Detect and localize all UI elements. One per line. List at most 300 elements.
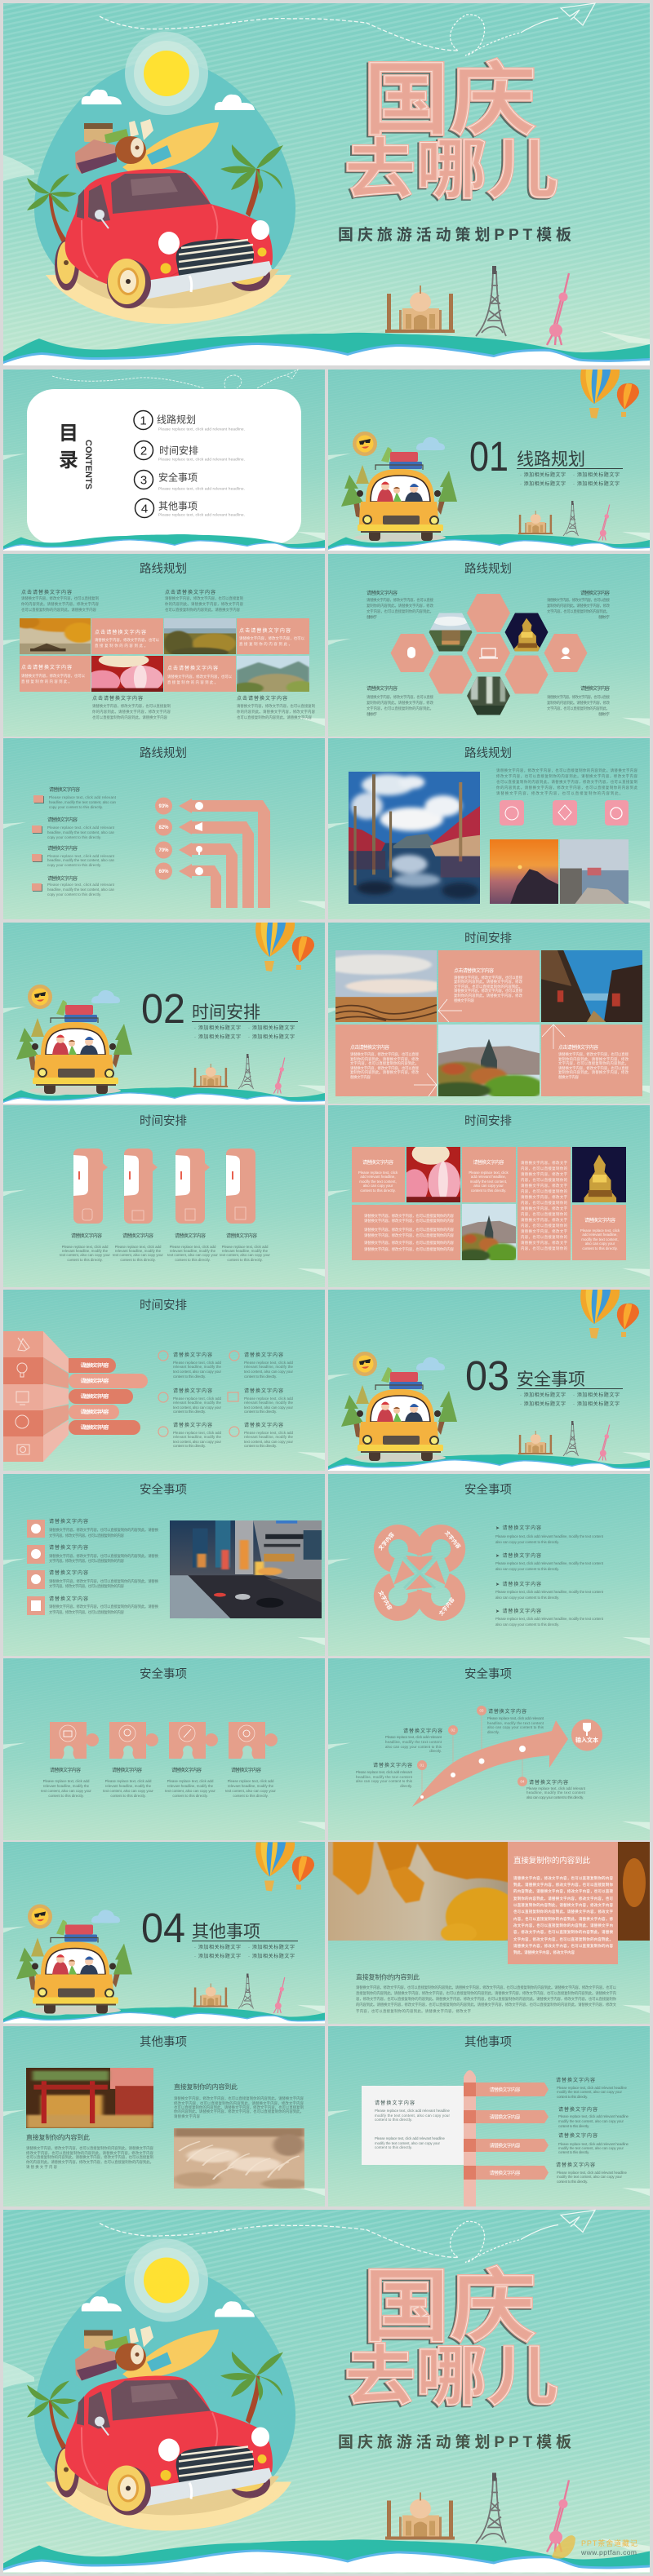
photo grid: 请替换文字内容，修改文字内容，也可以 xyxy=(21,673,86,679)
markers: 01 xyxy=(420,1764,424,1767)
pink text panel: 容，修改文字内容，也可以直接复制你的内容到此。请替换 xyxy=(513,1929,614,1935)
caption 2 xyxy=(113,1233,163,1262)
white card: content to this directly. xyxy=(375,2145,412,2149)
text block top right: 请替换文字内容，修改文字内容，也可以直接复制 xyxy=(165,595,244,601)
pink cell C: modify the text content, xyxy=(470,1180,507,1184)
section heading: 线路规划 xyxy=(517,450,585,469)
bullets: · 添加相关标题文字 xyxy=(573,480,620,487)
callout 03: also can copy your content to this xyxy=(487,1725,544,1729)
text block top left: 你的内容到此。请替换文字内容，修改文字内容 xyxy=(21,601,100,607)
title: 路线规划 xyxy=(464,746,512,760)
item grid: content to this directly. xyxy=(173,1374,206,1379)
left list: 请替换文字内容 xyxy=(47,875,78,882)
caption 2: content to this directly. xyxy=(120,1258,156,1262)
list text: Please replace text, click add relevant headline, modify the text content xyxy=(495,1590,604,1594)
title: 安全事项 xyxy=(140,1666,187,1681)
sign captions: Please replace text, click add relevant headline xyxy=(558,2114,629,2118)
funnel bars: 请替换文字内容 xyxy=(80,1378,109,1384)
bullets: · 添加相关标题文字 xyxy=(194,1944,241,1950)
caption 1 xyxy=(60,1233,110,1262)
photo grid: 请替换文字内容，修改文字内容，也可以 xyxy=(239,635,305,641)
pink text cell: 请替换文字内容，修改文字内容，也可以直接 xyxy=(350,1065,420,1071)
callout 03: Please replace text, click add relevant xyxy=(487,1716,544,1720)
caption 1: text content, also can copy your xyxy=(60,1253,110,1257)
text bottom right: 复制你的内容到此。请替换文字内容，修改 xyxy=(547,700,611,706)
callout 02: Please replace text, click add relevant xyxy=(385,1735,442,1739)
panel: route grid slide xyxy=(3,554,325,737)
pink cell C: also can copy your xyxy=(473,1184,504,1188)
left list: copy your content to this directly. xyxy=(47,863,101,867)
item grid: content to this directly. xyxy=(244,1410,277,1414)
callout 04: Please replace text, click add relevant xyxy=(526,1786,586,1790)
photo grid: 直接复制你的内容到此。 xyxy=(95,643,148,648)
left list: headline, modify the text content, also can xyxy=(49,800,117,804)
item 4: Please replace text, click add relevant headline. xyxy=(158,512,245,517)
pink cell H: 请替换文字内容 xyxy=(584,1217,615,1224)
panel: section 03 xyxy=(328,1290,650,1471)
percent ovals: 82% xyxy=(158,825,169,830)
panel: closing slide xyxy=(3,2210,650,2574)
photo grid: 请替换文字内容，修改文字内容，也可以 xyxy=(95,637,160,643)
item grid: 请替换文字内容 xyxy=(173,1422,212,1428)
markers: 02 xyxy=(451,1728,455,1733)
text block bottom middle: 请替换文字内容，修改文字内容，也可以直接复制 xyxy=(92,703,171,709)
pink text panel: 也可以直接复制你的内容到此。请替换文字内容，修改文字 xyxy=(513,1909,614,1914)
item 2: Please replace text, click add relevant headline. xyxy=(158,457,245,462)
pink cell C: add relevant headline, xyxy=(471,1175,506,1179)
sign captions: content to this directly. xyxy=(558,2124,589,2128)
item 3: 安全事项 xyxy=(158,471,198,483)
left paragraph xyxy=(26,2145,154,2170)
clover arrows diagram: 文字内容 xyxy=(443,1529,463,1551)
text top right: 复制你的内容到此。请替换文字内容，修改 xyxy=(547,603,611,609)
text block top right xyxy=(165,589,244,613)
title: 路线规划 xyxy=(140,562,187,576)
photo grid: 直接复制你的内容到此。 xyxy=(21,679,72,684)
pink cell A: also can copy your xyxy=(363,1184,393,1188)
caption 4: content to this directly. xyxy=(227,1258,263,1262)
bullets: · 添加相关标题文字 xyxy=(573,1392,620,1398)
text bottom right: 请替换文字内容 xyxy=(580,685,610,692)
lower paragraph xyxy=(356,1985,617,2014)
section heading: 安全事项 xyxy=(517,1370,585,1389)
pink text cell: 请替换文字内容，修改文字内容，也可以直接 xyxy=(454,988,523,994)
target circle: 输入文本 xyxy=(575,1736,598,1744)
heading rule xyxy=(517,1388,623,1389)
item grid: Please replace text, click add xyxy=(244,1431,294,1435)
pink cell H: content to this directly. xyxy=(582,1246,618,1250)
markers xyxy=(417,1706,527,1799)
pink text cell: 点击请替换文字内容 xyxy=(350,1044,389,1051)
callout 02: headline, modify the text content xyxy=(385,1740,442,1744)
item grid: 请替换文字内容 xyxy=(173,1388,212,1394)
list text: Please replace text, click add relevant headline, modify the text content xyxy=(495,1534,604,1538)
flight line xyxy=(52,370,298,392)
item 2: 时间安排 xyxy=(159,444,198,457)
pink text cell: 复制你的内容到此。请替换文字内容，修改 xyxy=(350,1056,420,1062)
captions: text content, also can copy your xyxy=(103,1789,153,1793)
bullets: · 添加相关标题文字 xyxy=(520,480,566,487)
bullets: · 添加相关标题文字 xyxy=(248,1944,295,1950)
item grid: 请替换文字内容 xyxy=(244,1422,283,1428)
pink text panel: 改文字内容，也可以直接复制你的内容到此。请替换文字内 xyxy=(513,1923,614,1928)
callout 04 xyxy=(526,1779,586,1799)
item grid: Please replace text, click add xyxy=(173,1396,222,1401)
photo grid: 直接复制你的内容到此。 xyxy=(239,641,292,647)
gold tower photo xyxy=(572,1147,626,1202)
text bottom right: 文字内容，也可以直接复制你的内容到此。 xyxy=(547,706,610,711)
percent ovals: 70% xyxy=(158,848,169,853)
lower paragraph: 字内容，也可以直接复制你的内容到此。请替换文字内容，修改文字 xyxy=(356,2008,472,2014)
caption 4: relevant headline, modify the xyxy=(222,1249,269,1253)
captions: content to this directly. xyxy=(233,1794,269,1798)
item grid: Please replace text, click add xyxy=(244,1396,294,1401)
left list: Please replace text, click add relevant xyxy=(49,795,117,799)
pink text panel: 到此。请替换文字内容，修改文字内容，也可以直接复制你 xyxy=(513,1882,614,1888)
sign captions: Please replace text, click add relevant headline xyxy=(557,2086,628,2090)
callout 04: headline, modify the text content xyxy=(526,1790,586,1795)
list text: also can copy your content to this directly. xyxy=(495,1596,559,1600)
section illustration xyxy=(328,370,650,551)
item grid: text content, also can copy your xyxy=(173,1370,222,1374)
icon tiles xyxy=(27,1520,45,1615)
caption 4: text content, also can copy your xyxy=(220,1253,270,1257)
pink text cell: 请替换文字内容，修改文字内容，也可以直接 xyxy=(558,1051,629,1057)
text block bottom right: 点击请替换文字内容 xyxy=(237,695,287,702)
panel: clover arrows slide xyxy=(328,1474,650,1656)
item 1: 线路规划 xyxy=(157,413,196,426)
text block bottom middle: 点击请替换文字内容 xyxy=(92,695,143,702)
bullets: · 添加相关标题文字 xyxy=(248,1033,295,1040)
list text: also can copy your content to this directly. xyxy=(495,1622,559,1627)
text block top right: 点击请替换文字内容 xyxy=(165,589,215,595)
lake photo xyxy=(349,772,480,904)
card 1 xyxy=(73,1149,108,1224)
pink text panel: 以直接复制你的内容到此。请替换文字内容，修改文字内容 xyxy=(513,1902,614,1908)
section illustration xyxy=(328,1290,650,1471)
item grid: Please replace text, click add xyxy=(173,1361,222,1365)
tall pink cell: 内容，也可以直接复制你的 xyxy=(521,1246,568,1251)
bullets: · 添加相关标题文字 xyxy=(573,1401,620,1407)
card 2 xyxy=(124,1149,158,1224)
pink text cell: 请替换文字内容，修改文字内容，也可以直接 xyxy=(350,1051,420,1057)
pink cell H: Please replace text, click xyxy=(580,1228,620,1233)
paragraph: 你的内容到此。请替换文字内容，修改文字内容，也可以直接复制你的内容到此 xyxy=(496,785,638,790)
title: 安全事项 xyxy=(464,1666,512,1681)
caption 1: Please replace text, click add xyxy=(62,1245,109,1249)
pink text panel: 请替换文字内容，修改文字内容，也可以直接复制你的内容 xyxy=(513,1943,614,1949)
bullets: · 添加相关标题文字 xyxy=(194,1953,241,1959)
street photo xyxy=(541,950,642,1022)
item 2 xyxy=(134,440,245,462)
funnel bars: 请替换文字内容 xyxy=(80,1393,109,1400)
bullets xyxy=(194,1944,295,1959)
list text: ➤ 请替换文字内容 xyxy=(495,1581,541,1587)
panel: ginkgo slide xyxy=(328,1842,650,2024)
text bottom left: 替换文字 xyxy=(366,711,378,717)
caption 2: relevant headline, modify the xyxy=(115,1249,162,1253)
sign captions: 请替换文字内容 xyxy=(556,2162,595,2168)
bullets: · 添加相关标题文字 xyxy=(248,1025,295,1031)
text block bottom right: 请替换文字内容，修改文字内容，也可以直接复制 xyxy=(237,703,316,709)
caption 2: 请替换文字内容 xyxy=(122,1233,153,1239)
pink cell F: 请替换文字内容，修改文字内容，也可以直接复制你的内容 xyxy=(364,1246,455,1252)
pink cell A: content to this directly. xyxy=(360,1188,396,1193)
photo grid: 直接复制你的内容到此。 xyxy=(167,679,218,685)
right paragraph: 你的内容到此。请替换文字内容，修改文字内容，也可以直接复制你的内容到此。 xyxy=(174,2109,304,2114)
captions: text content, also can copy your xyxy=(41,1789,91,1793)
photo grid: 点击请替换文字内容 xyxy=(21,664,72,671)
pink text cell: 文字内容，也可以直接复制你的内容到此。 xyxy=(558,1060,629,1066)
title: 路线规划 xyxy=(464,562,512,576)
pagoda photo xyxy=(455,1204,518,1264)
text top left xyxy=(366,590,434,620)
pink cell F: 请替换文字内容，修改文字内容，也可以直接复制你的内容 xyxy=(364,1213,455,1219)
text block bottom middle xyxy=(92,695,171,720)
pink text cell: 文字内容，也可以直接复制你的内容到此。 xyxy=(454,984,522,989)
photo grid xyxy=(14,613,315,694)
right heading: 直接复制你的内容到此 xyxy=(174,2082,238,2091)
list text: 文字内容，修改文字内容，也可以直接复制你的内容 xyxy=(49,1558,125,1564)
paragraph: 请替换文字内容，修改文字内容，也可以直接复制你的内容到此。 xyxy=(496,790,623,796)
tall pink cell: 内容，也可以直接复制你的 xyxy=(521,1200,568,1206)
callout 03: 请替换文字内容 xyxy=(488,1708,526,1715)
captions: relevant headline, modify the xyxy=(105,1784,152,1788)
number 03: 03 xyxy=(465,1352,509,1399)
captions: content to this directly. xyxy=(48,1794,84,1798)
text block top left: 点击请替换文字内容 xyxy=(21,589,72,595)
text bottom left: 复制你的内容到此。请替换文字内容，修改 xyxy=(366,700,434,706)
left list: copy your content to this directly. xyxy=(49,805,103,809)
bent arrows xyxy=(179,799,270,908)
item grid: text content, also can copy your xyxy=(244,1405,294,1410)
item 4: 4 xyxy=(141,502,148,516)
panel: two photos slide xyxy=(3,2026,325,2206)
puzzle pieces xyxy=(50,1722,278,1759)
sign 1 xyxy=(464,2082,549,2096)
markers: 03 xyxy=(480,1708,484,1713)
tall pink cell: 请替换文字内容，修改文字 xyxy=(521,1183,568,1188)
funnel bars: 请替换文字内容 xyxy=(80,1424,109,1431)
watermark: www.pptfan.com xyxy=(580,2548,637,2556)
callout 02: 请替换文字内容 xyxy=(403,1728,442,1734)
lower paragraph: 请替换文字内容，修改文字内容，也可以直接复制你的内容到此。请替换文字内容，修改文字内容，也可以直接复制你的内容到此。请替换文字内容，修改文字内容，也可以 xyxy=(356,1985,617,1990)
caption 3 xyxy=(167,1233,218,1262)
list text: also can copy your content to this directly. xyxy=(495,1567,559,1571)
section heading: 时间安排 xyxy=(192,1003,260,1022)
captions: 请替换文字内容 xyxy=(231,1767,261,1773)
sign 2 xyxy=(464,2110,549,2123)
caption 4: 请替换文字内容 xyxy=(226,1233,257,1239)
pink cell H: modify the text content, xyxy=(581,1237,619,1242)
captions: Please replace text, click add xyxy=(167,1779,214,1783)
desert photo xyxy=(320,950,446,1022)
caption 2: text content, also can copy your xyxy=(113,1253,163,1257)
text block top right: 你的内容到此。请替换文字内容，修改文字内容 xyxy=(165,601,244,607)
item 3 xyxy=(134,470,245,491)
white card xyxy=(362,2086,464,2165)
sign captions: modify the text content, also can copy your xyxy=(558,2146,624,2150)
sign captions: 请替换文字内容 xyxy=(558,2106,597,2113)
sign captions xyxy=(556,2077,629,2184)
photo grid: 点击请替换文字内容 xyxy=(95,629,146,635)
text block bottom middle: 你的内容到此。请替换文字内容，修改文字内容 xyxy=(92,709,171,715)
pink text panel: 请替换文字内容，修改文字内容，也可以直接复制你的内容 xyxy=(513,1875,614,1881)
title: 安全事项 xyxy=(464,1482,512,1497)
text top left: 请替换文字内容 xyxy=(366,590,398,596)
sign captions: modify the text content, also can copy your xyxy=(557,2175,623,2179)
callout 03 xyxy=(487,1708,544,1734)
pink text panel: 复制你的内容到此。请替换文字内容，修改文字内容，也可 xyxy=(513,1896,614,1901)
panel: cover slide: 国庆旅游活动策划PPT模板 xyxy=(338,225,571,244)
text top left: 请替换文字内容，修改文字内容，也可以直接 xyxy=(366,597,434,603)
curved arrow xyxy=(412,1720,568,1807)
number 02: 02 xyxy=(141,985,185,1032)
heading rule xyxy=(192,1021,298,1022)
left paragraph: 也可以直接复制你的内容到此。请替换文字内容，修改文字内容，也可以直接复制 xyxy=(26,2154,154,2160)
arrow icons xyxy=(195,802,203,875)
item 2: 2 xyxy=(140,444,147,458)
item grid: content to this directly. xyxy=(244,1444,277,1448)
sign captions: modify the text content, also can copy your xyxy=(557,2090,623,2094)
item grid: relevant headline, modify the xyxy=(173,1401,222,1405)
lower paragraph: 直接复制你的内容到此。请替换文字内容，修改文字内容，也可以直接复制你的内容到此。请替换文字内容，修改文字内容，也可以直接复制你的内容到此。请替换文字内 xyxy=(356,1990,616,1996)
text block bottom middle: 也可以直接复制你的内容到此。请替换文字内容 xyxy=(92,715,168,720)
item grid: relevant headline, modify the xyxy=(173,1435,222,1439)
text bottom left: 请替换文字内容 xyxy=(366,685,398,692)
pink text cell: 点击请替换文字内容 xyxy=(454,967,494,974)
left list: 请替换文字内容 xyxy=(47,845,78,852)
right paragraph: 请替换文字内容 xyxy=(174,2113,201,2119)
captions: 请替换文字内容 xyxy=(112,1767,142,1773)
caption 1: content to this directly. xyxy=(67,1258,103,1262)
captions: text content, also can copy your xyxy=(225,1789,276,1793)
text bottom left: 文字内容，也可以直接复制你的内容到此。 xyxy=(366,706,433,711)
captions: relevant headline, modify the xyxy=(228,1784,274,1788)
list text: 请替换文字内容，修改文字内容，也可以直接复制你的内容到此。请替换 xyxy=(49,1527,159,1533)
panel: bent arrows slide xyxy=(3,738,325,919)
text bottom right: 请替换文字内容，修改文字内容，也可以直接 xyxy=(547,694,611,700)
lower paragraph: 的内容到此。请替换文字内容，修改文字内容，也可以直接复制你的内容到此。请替换文字内容，修改文字内容，也可以直接复制你的内容到此。请替换文字内容，修改文 xyxy=(356,2002,617,2007)
pink text cell xyxy=(335,1025,437,1096)
list text: 请替换文字内容 xyxy=(49,1596,88,1602)
list text: 文字内容，修改文字内容，也可以直接复制你的内容 xyxy=(49,1533,125,1538)
percent ovals: 60% xyxy=(158,870,169,874)
item grid: content to this directly. xyxy=(244,1374,277,1379)
white card: modify the text content, also can copy your xyxy=(375,2141,441,2145)
gate photo xyxy=(26,2068,153,2128)
bullets: · 添加相关标题文字 xyxy=(573,471,620,478)
pink cell C: content to this directly. xyxy=(471,1188,506,1193)
tall pink cell: 请替换文字内容，修改文字 xyxy=(521,1194,568,1200)
white card: Please replace text, click add relevant headline xyxy=(375,2109,451,2113)
text top left: 复制你的内容到此。请替换文字内容，修改 xyxy=(366,603,434,609)
pink text cell: 复制你的内容到此。请替换文字内容，修改 xyxy=(454,979,523,985)
list text: also can copy your content to this directly. xyxy=(495,1540,559,1544)
CONTENTS: CONTENTS xyxy=(83,440,93,489)
sign captions: Please replace text, click add relevant headline xyxy=(558,2142,629,2146)
left list: 请替换文字内容 xyxy=(47,817,78,823)
heading 目录: 录 xyxy=(59,449,78,471)
text bottom right xyxy=(547,685,611,717)
title: 时间安排 xyxy=(464,1114,512,1128)
tall pink cell: 请替换文字内容，修改文字 xyxy=(521,1240,568,1246)
bullets: · 添加相关标题文字 xyxy=(520,471,566,478)
pink text cell: 复制你的内容到此。请替换文字内容，修改 xyxy=(558,1056,629,1062)
pink text cell: 请替换文字内容，修改文字内容，也可以直接 xyxy=(558,1065,629,1071)
tall pink cell: 内容，也可以直接复制你的 xyxy=(521,1177,568,1183)
tall pink cell: 请替换文字内容，修改文字 xyxy=(521,1160,568,1166)
tall pink cell: 请替换文字内容，修改文字 xyxy=(521,1217,568,1223)
title: 时间安排 xyxy=(140,1299,187,1312)
panel: section 02 xyxy=(3,923,325,1104)
reeds photo xyxy=(174,2128,309,2189)
item grid: Please replace text, click add xyxy=(173,1431,222,1435)
tall pink cell: 内容，也可以直接复制你的 xyxy=(521,1234,568,1240)
photo grid: 点击请替换文字内容 xyxy=(167,665,218,671)
pink text panel: 的内容到此。请替换文字内容，修改文字内容，也可以直接 xyxy=(513,1888,614,1894)
item grid: text content, also can copy your xyxy=(244,1440,294,1444)
card 4 xyxy=(226,1149,255,1224)
photo grid: 点击请替换文字内容 xyxy=(239,627,291,634)
pink cell C: Please replace text, click xyxy=(469,1171,509,1175)
pink cell F: 请替换文字内容，修改文字内容，也可以直接复制你的内容 xyxy=(364,1240,455,1246)
pink text cell xyxy=(541,1025,642,1096)
pink text panel: 内容，也可以直接复制你的内容到此。请替换文字内容，修 xyxy=(513,1916,614,1922)
list text: 请替换文字内容 xyxy=(49,1569,88,1576)
pagoda photo xyxy=(426,1025,544,1100)
caption 4: Please replace text, click add xyxy=(222,1245,269,1249)
pink text cell xyxy=(438,950,540,1022)
caption 3: text content, also can copy your xyxy=(167,1253,218,1257)
item grid: 请替换文字内容 xyxy=(244,1388,283,1394)
left list: Please replace text, click add relevant xyxy=(47,825,115,830)
left list: 请替换文字内容 xyxy=(49,786,80,793)
left heading: 直接复制你的内容到此 xyxy=(26,2133,90,2141)
sea photo xyxy=(560,839,629,904)
sign captions: content to this directly. xyxy=(558,2150,589,2154)
title: 安全事项 xyxy=(140,1482,187,1497)
caption 2: Please replace text, click add xyxy=(115,1245,162,1249)
captions: Please replace text, click add xyxy=(105,1779,152,1783)
text block bottom right: 也可以直接复制你的内容到此。请替换文字内容 xyxy=(237,715,313,720)
list text: Please replace text, click add relevant headline, modify the text content xyxy=(495,1561,604,1565)
right paragraph: 也可以直接复制你的内容到此。请替换文字内容，修改文字内容，也可以直接复制 xyxy=(174,2105,304,2110)
caption 3: Please replace text, click add xyxy=(170,1245,216,1249)
title: 时间安排 xyxy=(464,932,512,945)
clover arrows diagram: 文字内容 xyxy=(376,1530,396,1551)
item grid: content to this directly. xyxy=(173,1444,206,1448)
sign 2: 请替换文字内容 xyxy=(490,2114,521,2121)
callout 03: headline, modify the text content xyxy=(487,1721,544,1725)
callout 02: directly. xyxy=(429,1749,442,1753)
text block bottom right: 你的内容到此。请替换文字内容，修改文字内容 xyxy=(237,709,316,715)
photo grid: 请替换文字内容，修改文字内容，也可以 xyxy=(167,674,233,679)
pink text panel: 到此。请替换文字内容，修改文字内容 xyxy=(513,1950,575,1955)
section illustration xyxy=(3,1842,325,2023)
heading 目录 xyxy=(59,423,78,471)
pink cell F: 请替换文字内容，修改文字内容，也可以直接复制你的内容 xyxy=(364,1218,455,1224)
panel: lake photos slide xyxy=(328,738,650,919)
panel: mosaic slide xyxy=(328,1105,650,1287)
sign captions: 请替换文字内容 xyxy=(556,2077,595,2083)
list text: 请替换文字内容 xyxy=(49,1544,88,1551)
list text xyxy=(495,1525,604,1627)
ginkgo photo xyxy=(328,1842,650,1946)
sign captions: Please replace text, click add relevant headline xyxy=(557,2171,628,2175)
white card: modify the text content, also can copy your xyxy=(375,2113,451,2118)
pink cell H xyxy=(572,1205,626,1260)
